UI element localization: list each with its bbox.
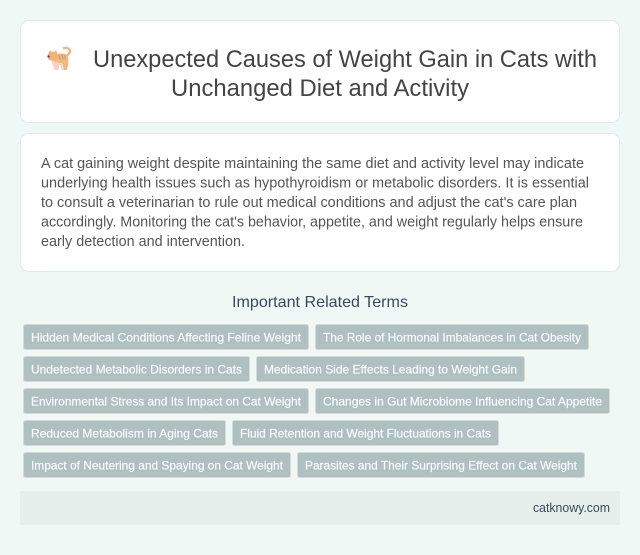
- tag: [24, 452, 290, 478]
- title: [93, 46, 597, 102]
- icon: cat: [47, 48, 70, 70]
- tag: Changes in Gut Microbiome Influencing Cat Appetite: [323, 394, 602, 408]
- text block: intro paragraph: A cat gaining weight despite maintaining the same diet and activity level may indicate: [41, 156, 584, 172]
- panel: related terms tags: [24, 324, 610, 478]
- tag: [24, 356, 250, 382]
- title: Unchanged Diet and Activity: [171, 75, 469, 102]
- tag: Parasites and Their Surprising Effect on Cat Weight: [305, 458, 578, 472]
- text block: intro paragraph: [41, 156, 589, 250]
- tag: Hidden Medical Conditions Affecting Feline Weight: [31, 330, 302, 344]
- tag: [256, 356, 524, 382]
- tag: Environmental Stress and Its Impact on Cat Weight: [31, 394, 302, 408]
- text block: intro paragraph: to consult a veterinarian to rule out medical conditions and adjust the cat's care plan: [41, 195, 577, 211]
- panel: title card: [20, 20, 620, 122]
- tag: Fluid Retention and Weight Fluctuations in Cats: [240, 426, 491, 440]
- panel: intro paragraph card: [20, 134, 620, 272]
- text block: intro paragraph: underlying health issues such as hypothyroidism or metabolic disorders. It is essential: [41, 176, 589, 192]
- heading: important related terms: Important Related Terms: [232, 294, 408, 311]
- tag: The Role of Hormonal Imbalances in Cat Obesity: [323, 330, 581, 344]
- tag: [24, 388, 308, 414]
- text block: intro paragraph: accordingly. Monitoring the cat's behavior, appetite, and weight regularly helps ensure: [41, 214, 583, 230]
- tag: Reduced Metabolism in Aging Cats: [31, 426, 218, 440]
- footer: [20, 491, 620, 525]
- tag: [316, 324, 588, 350]
- tag: [24, 420, 226, 446]
- tag: Medication Side Effects Leading to Weight Gain: [264, 362, 517, 376]
- tag: [232, 420, 498, 446]
- tag: Impact of Neutering and Spaying on Cat Weight: [31, 458, 284, 472]
- title: Unexpected Causes of Weight Gain in Cats with: [93, 46, 597, 73]
- footer site name: catknowy.com: [533, 500, 610, 515]
- tag: [298, 452, 584, 478]
- tag: Undetected Metabolic Disorders in Cats: [31, 362, 242, 376]
- tag: [316, 388, 610, 414]
- text block: intro paragraph: early detection and intervention.: [41, 234, 245, 250]
- tag: [24, 324, 308, 350]
